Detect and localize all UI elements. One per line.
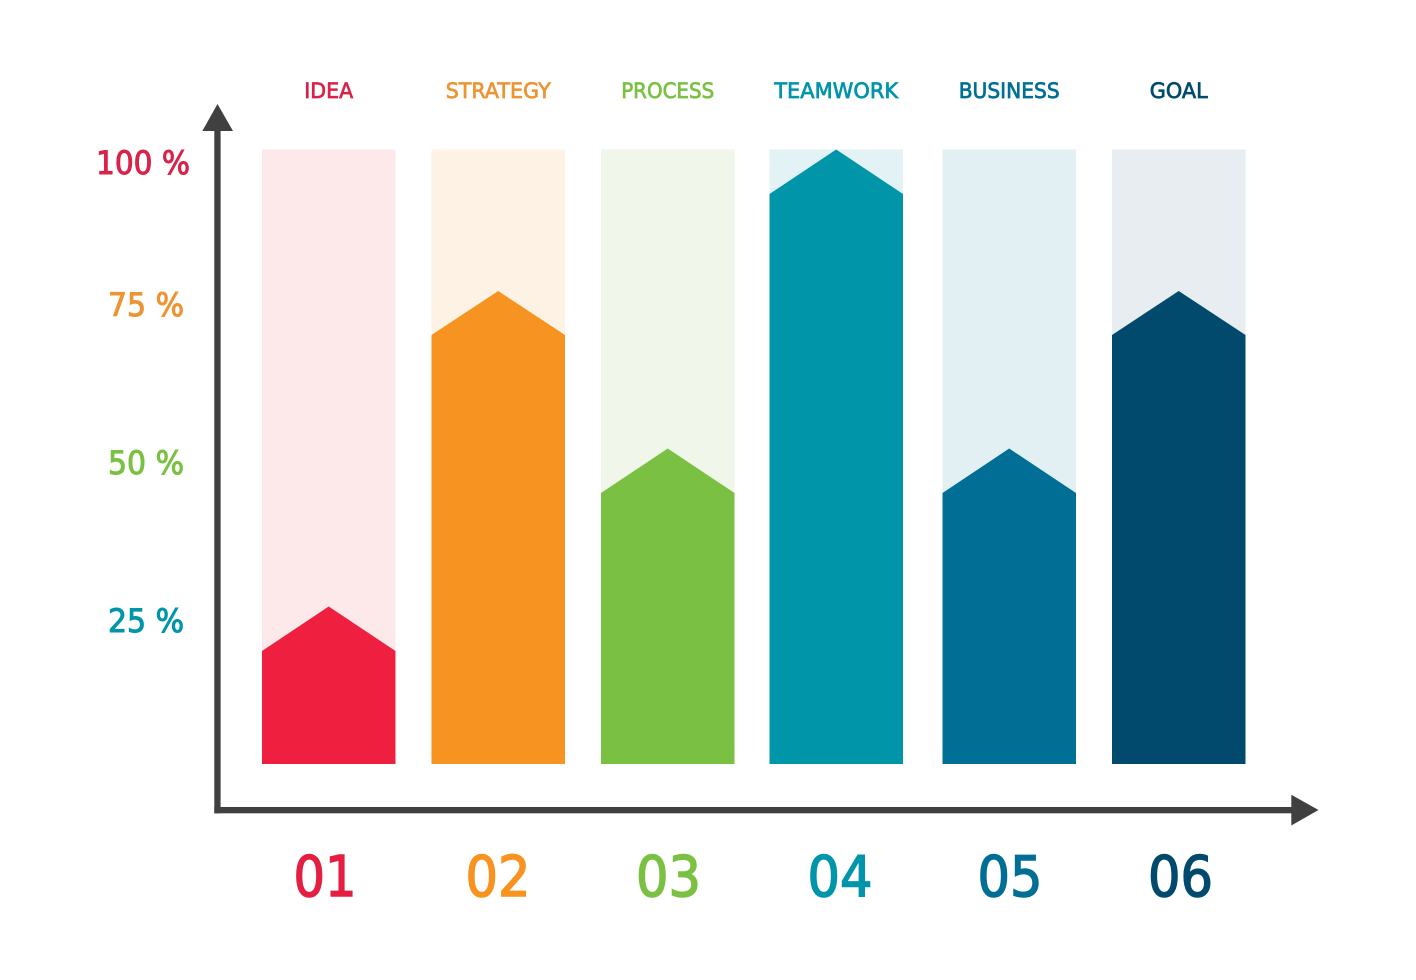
column: process: [601, 150, 734, 764]
column: business: [942, 150, 1076, 764]
column: teamwork: [770, 150, 903, 764]
arrow: vertical axis: [202, 104, 233, 813]
axis label: 25 %: 25 %: [108, 602, 184, 640]
number: 01: 01: [294, 845, 356, 910]
number: 06: 06: [1148, 845, 1213, 910]
axis label: 75 %: 75 %: [108, 286, 184, 324]
number: 02: 02: [466, 845, 530, 910]
column: strategy: [432, 150, 565, 764]
category label: idea: IDEA: [304, 79, 354, 103]
column: idea: [262, 150, 396, 764]
axis label: 50 %: 50 %: [108, 444, 184, 482]
axis label: 100 %: 100 %: [96, 144, 190, 182]
arrow: horizontal axis: [214, 795, 1318, 826]
category label: strategy: STRATEGY: [446, 79, 551, 103]
number: 04: 04: [808, 845, 872, 910]
category label: business: BUSINESS: [959, 79, 1060, 103]
number: 05: 05: [978, 845, 1042, 910]
category label: goal: GOAL: [1150, 79, 1208, 103]
category label: teamwork: TEAMWORK: [773, 79, 899, 103]
category label: process: PROCESS: [621, 79, 714, 103]
column: goal: [1112, 150, 1246, 764]
number: 03: 03: [636, 845, 701, 910]
